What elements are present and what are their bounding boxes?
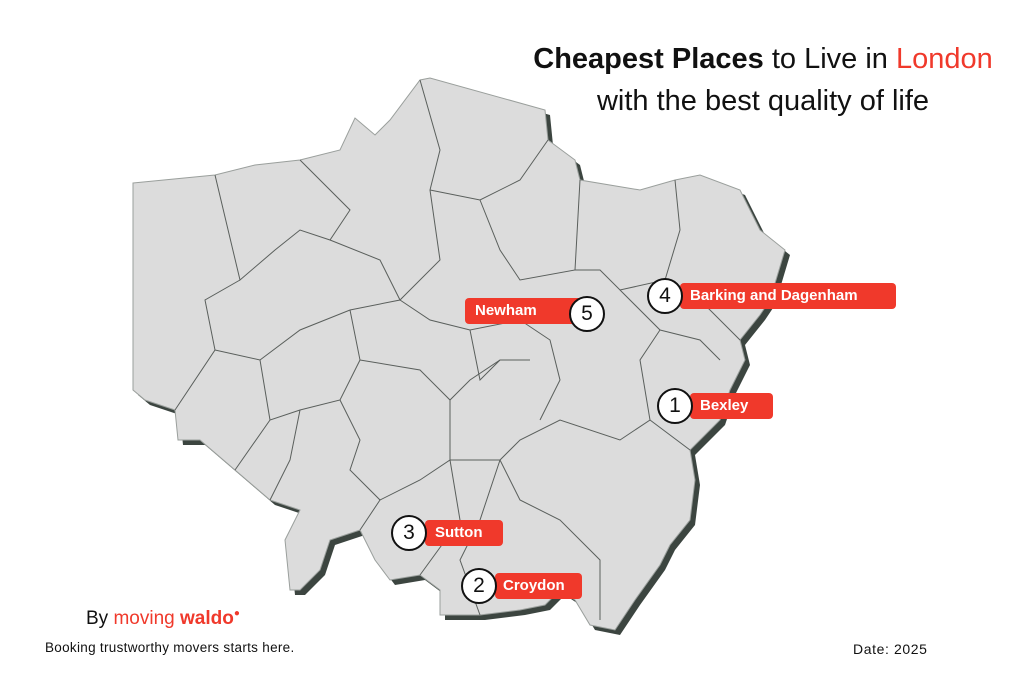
label: Bexley [657, 388, 773, 424]
label: Croydon: Croydon [503, 577, 565, 594]
label: Croydon: 2 [473, 574, 485, 597]
label: Bexley: Bexley [700, 397, 748, 414]
logo: By moving waldo● [86, 608, 240, 629]
title [533, 43, 993, 117]
label: Sutton: 3 [403, 521, 415, 544]
label: Barking and Dagenham: Barking and Dagenham [690, 287, 858, 304]
date: Date: 2025 [853, 641, 928, 657]
label: Barking and Dagenham [647, 278, 896, 314]
label: Newham: 5 [581, 302, 593, 325]
label: Bexley: 1 [669, 394, 681, 417]
title: with the best quality of life [597, 85, 929, 117]
label: Croydon [461, 568, 582, 604]
label: Newham [465, 296, 605, 332]
label: Sutton [391, 515, 503, 551]
tagline: Booking trustworthy movers starts here. [45, 640, 295, 655]
label: Barking and Dagenham: 4 [659, 284, 671, 307]
label: Sutton: Sutton [435, 524, 482, 541]
label: Newham: Newham [475, 302, 537, 319]
title: Cheapest Places to Live in London [533, 43, 993, 75]
